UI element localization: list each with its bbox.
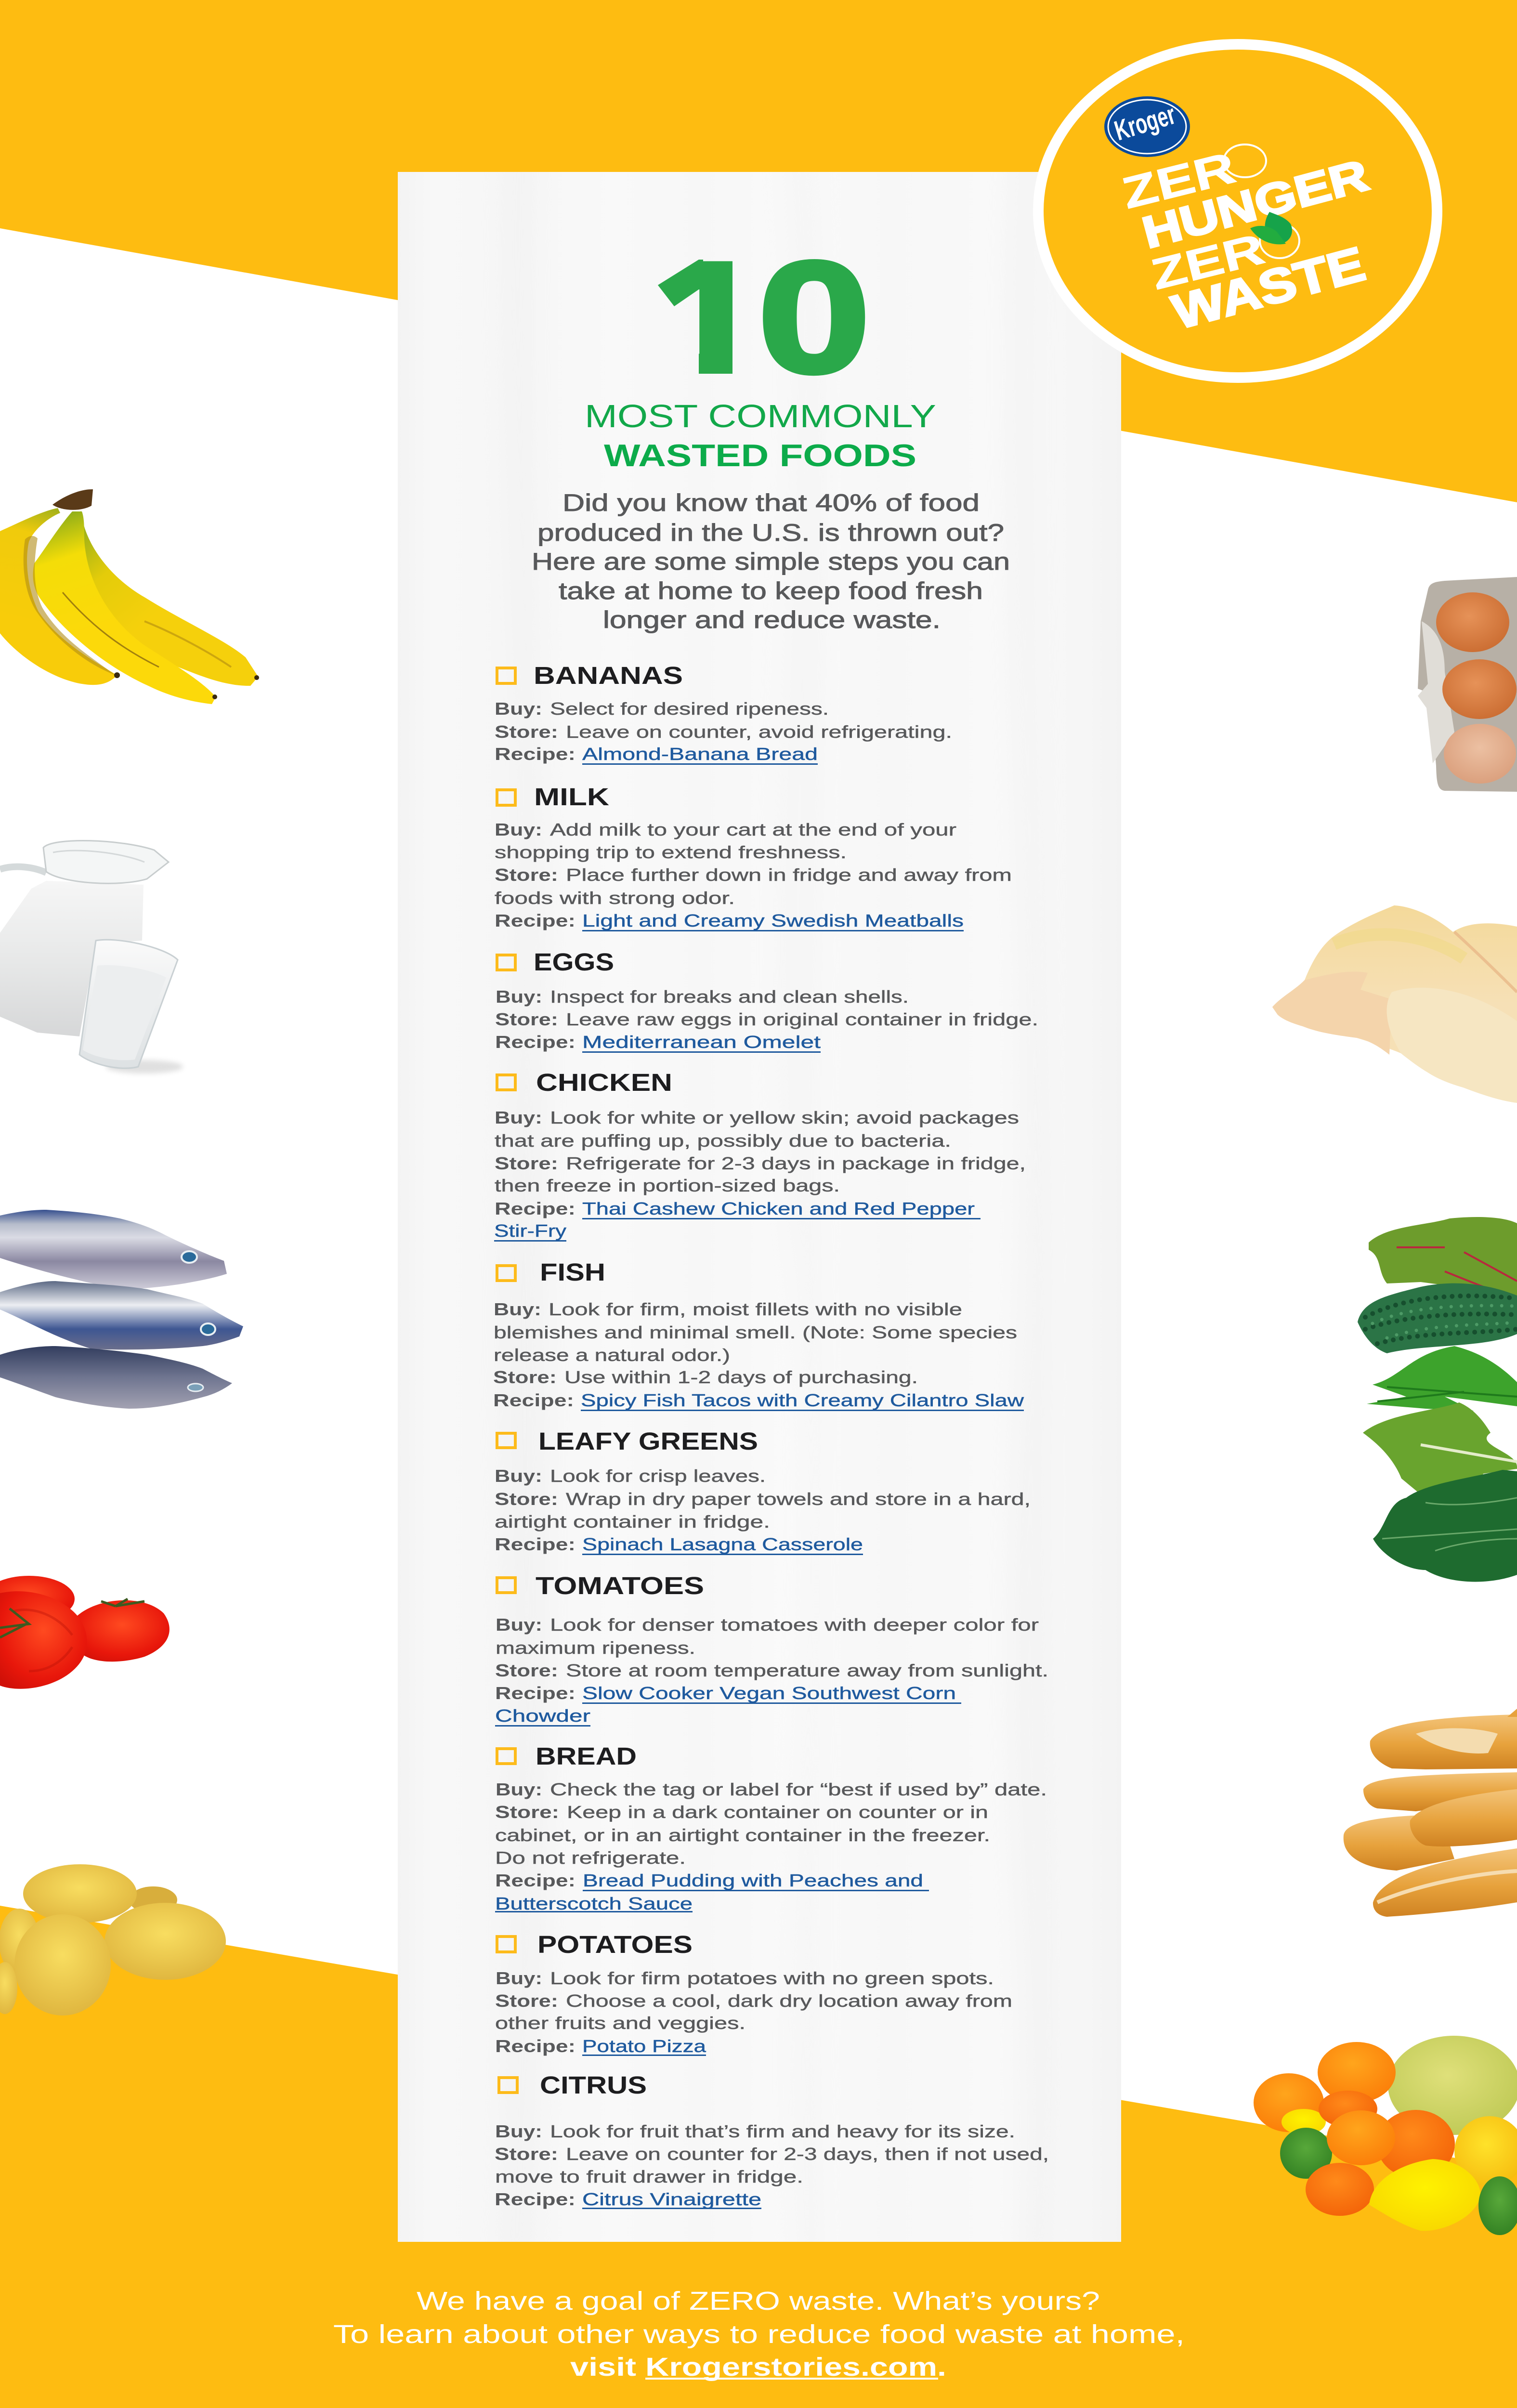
footer message: To learn about other ways to reduce food waste at home,	[333, 2320, 1185, 2349]
footer message: visit	[570, 2353, 636, 2382]
item: fish: release a natural odor.)	[494, 1345, 730, 1365]
item: citrus: Recipe:	[495, 2189, 575, 2209]
item: tomatoes: Buy:	[496, 1615, 542, 1635]
item: eggs: EGGS	[534, 948, 614, 976]
item: citrus: CITRUS	[540, 2071, 647, 2099]
item: chicken: Look for white or yellow skin; avoid packages	[550, 1108, 1019, 1127]
item: potatoes	[495, 1931, 1012, 2056]
item: potatoes: POTATOES	[537, 1931, 693, 1958]
photo: raw chicken	[1272, 905, 1517, 1103]
slogan: waste: WASTE	[1167, 236, 1371, 340]
item: milk: Recipe:	[495, 911, 575, 930]
photo: potatoes	[0, 1864, 226, 2015]
item: bananas: Select for desired ripeness.	[550, 699, 829, 719]
item: bananas: Store:	[495, 722, 558, 742]
item: bananas	[495, 662, 952, 765]
bottom yellow band	[0, 1906, 1517, 2408]
item: bread: Keep in a dark container on counter or in	[567, 1802, 988, 1822]
item: bread: Do not refrigerate.	[495, 1848, 686, 1868]
photo: eggs in carton	[1418, 577, 1517, 792]
item: leafy greens: Recipe:	[495, 1534, 575, 1554]
photo: tomatoes	[0, 1576, 170, 1689]
item: chicken: Buy:	[495, 1108, 542, 1127]
item: bread: Bread Pudding with Peaches and	[583, 1871, 923, 1890]
item: potatoes: Potato Pizza	[582, 2036, 706, 2056]
item: fish: Recipe:	[493, 1390, 574, 1410]
item: milk: Place further down in fridge and away from	[566, 865, 1012, 885]
logo: kroger: Kroger	[1111, 99, 1179, 146]
item: tomatoes: Store:	[495, 1661, 558, 1680]
item: eggs: Leave raw eggs in original container in fridge.	[566, 1009, 1038, 1029]
item: chicken: Recipe:	[495, 1199, 575, 1218]
item: leafy greens: LEAFY GREENS	[538, 1427, 758, 1455]
title: wasted foods: WASTED FOODS	[604, 438, 916, 473]
item: fish: Spicy Fish Tacos with Creamy Cilantro Slaw	[581, 1390, 1024, 1410]
item: citrus: Citrus Vinaigrette	[582, 2189, 761, 2209]
item: chicken: CHICKEN	[536, 1069, 672, 1096]
item: eggs: Recipe:	[495, 1032, 575, 1052]
item: chicken: Stir-Fry	[494, 1221, 566, 1241]
item: chicken: that are puffing up, possibly due to bacteria.	[495, 1131, 951, 1151]
item: tomatoes	[495, 1572, 1048, 1727]
item: fish: FISH	[540, 1258, 605, 1286]
item: fish: Buy:	[494, 1299, 541, 1319]
logo: kroger	[1104, 96, 1190, 157]
item: potatoes: Choose a cool, dark dry location away from	[566, 1991, 1012, 2011]
item: tomatoes: Recipe:	[495, 1683, 575, 1703]
item: milk	[495, 783, 1012, 931]
slogan: hunger: HUNGER	[1138, 151, 1373, 258]
item: tomatoes: TOMATOES	[536, 1572, 704, 1599]
footer message: Krogerstories.com.	[645, 2353, 946, 2382]
item: tomatoes: Slow Cooker Vegan Southwest Corn	[582, 1683, 956, 1703]
item: milk: foods with strong odor.	[495, 888, 735, 908]
item: bread	[495, 1742, 1047, 1913]
item: chicken	[494, 1069, 1026, 1242]
slogan: zero: ZER O	[1117, 132, 1283, 218]
item: bananas: Almond-Banana Bread	[582, 744, 818, 764]
item: citrus: Leave on counter for 2-3 days, then if not used,	[566, 2144, 1049, 2164]
title: big number 10	[658, 259, 865, 376]
photo: milk jug and glass	[0, 840, 183, 1073]
item: citrus	[495, 2071, 1049, 2209]
item: fish: Look for firm, moist fillets with no visible	[549, 1299, 962, 1319]
item: bread: BREAD	[536, 1742, 637, 1770]
item: bread: Butterscotch Sauce	[495, 1894, 693, 1913]
item: chicken: Refrigerate for 2-3 days in package in fridge,	[566, 1153, 1026, 1173]
item: chicken: Store:	[495, 1153, 558, 1173]
item: bananas: Recipe:	[495, 744, 575, 764]
icon: green leaves	[1250, 212, 1292, 244]
item: bread: Check the tag or label for “best if used by” date.	[550, 1780, 1047, 1799]
slogan: zero, second line: ZER O	[1147, 214, 1312, 299]
item: eggs: Inspect for breaks and clean shells.	[550, 987, 909, 1007]
item: citrus: move to fruit drawer in fridge.	[495, 2167, 803, 2186]
item: milk: Add milk to your cart at the end of your	[550, 820, 956, 839]
item: citrus: Store:	[495, 2144, 558, 2164]
item: bananas: Buy:	[495, 699, 542, 719]
item: leafy greens: Wrap in dry paper towels and store in a hard,	[566, 1489, 1031, 1509]
footer message	[333, 2287, 1185, 2382]
intro text: take at home to keep food fresh	[559, 577, 983, 604]
title: most commonly: MOST COMMONLY	[585, 398, 936, 434]
item: leafy greens: Buy:	[495, 1466, 542, 1486]
panel: paper card with tips	[398, 144, 1121, 2264]
item: fish: Store:	[493, 1367, 557, 1387]
photo: fish	[0, 1210, 243, 1409]
photo: citrus fruits	[1254, 2036, 1517, 2235]
item: chicken: then freeze in portion-sized bags.	[495, 1176, 840, 1195]
item: bread: Store:	[495, 1802, 559, 1822]
item: tomatoes: Store at room temperature away from sunlight.	[566, 1661, 1048, 1680]
item: fish: blemishes and minimal smell. (Note: Some species	[494, 1322, 1017, 1342]
item: leafy greens: airtight container in fridge.	[495, 1512, 770, 1531]
item: potatoes: Recipe:	[495, 2036, 575, 2056]
footer message: We have a goal of ZERO waste. What’s yours?	[417, 2287, 1100, 2316]
item: potatoes: other fruits and veggies.	[495, 2013, 745, 2033]
intro text	[532, 489, 1010, 633]
item: bread: Buy:	[496, 1780, 542, 1799]
item: potatoes: Buy:	[496, 1968, 542, 1988]
item: eggs: Mediterranean Omelet	[582, 1032, 821, 1052]
top yellow band	[0, 0, 1517, 502]
item: fish: Use within 1-2 days of purchasing.	[564, 1367, 918, 1387]
item: potatoes: Look for firm potatoes with no green spots.	[550, 1968, 994, 1988]
item: eggs: Buy:	[496, 987, 542, 1007]
item: eggs	[495, 948, 1038, 1053]
intro text: Did you know that 40% of food	[562, 489, 980, 516]
photo: bread loaves	[1344, 1709, 1517, 1917]
item: tomatoes: Look for denser tomatoes with deeper color for	[550, 1615, 1039, 1635]
intro text: longer and reduce waste.	[603, 606, 941, 633]
item: bananas: Leave on counter, avoid refrigerating.	[566, 722, 952, 742]
item: potatoes: Store:	[495, 1991, 558, 2011]
item: leafy greens: Spinach Lasagna Casserole	[582, 1534, 863, 1554]
item: citrus: Buy:	[495, 2121, 542, 2141]
item: milk: MILK	[534, 783, 609, 811]
photo: leafy greens	[1358, 1217, 1517, 1582]
photo: bananas	[0, 489, 259, 704]
item: milk: Light and Creamy Swedish Meatballs	[582, 911, 964, 930]
item: milk: Store:	[495, 865, 558, 885]
item: citrus: Look for fruit that’s firm and heavy for its size.	[550, 2121, 1015, 2141]
item: tomatoes: maximum ripeness.	[496, 1638, 695, 1658]
item: tomatoes: Chowder	[495, 1706, 590, 1726]
item: fish	[493, 1258, 1024, 1411]
intro text: Here are some simple steps you can	[532, 548, 1010, 575]
title: big number 10: 1	[654, 229, 768, 406]
item: leafy greens: Store:	[495, 1489, 558, 1509]
item: milk: Buy:	[495, 820, 542, 839]
item: milk: shopping trip to extend freshness.	[495, 842, 847, 862]
intro text: produced in the U.S. is thrown out?	[537, 519, 1004, 546]
item: bread: cabinet, or in an airtight container in the freezer.	[495, 1825, 990, 1845]
badge: zero hunger zero waste	[1038, 44, 1437, 378]
title: big number 10: 0	[758, 229, 870, 406]
item: bread: Recipe:	[495, 1871, 575, 1890]
item: leafy greens: Look for crisp leaves.	[550, 1466, 766, 1486]
item: chicken: Thai Cashew Chicken and Red Pepper	[582, 1199, 975, 1218]
item: eggs: Store:	[495, 1009, 558, 1029]
item: bananas: BANANAS	[534, 662, 683, 689]
item: leafy greens	[495, 1427, 1031, 1555]
